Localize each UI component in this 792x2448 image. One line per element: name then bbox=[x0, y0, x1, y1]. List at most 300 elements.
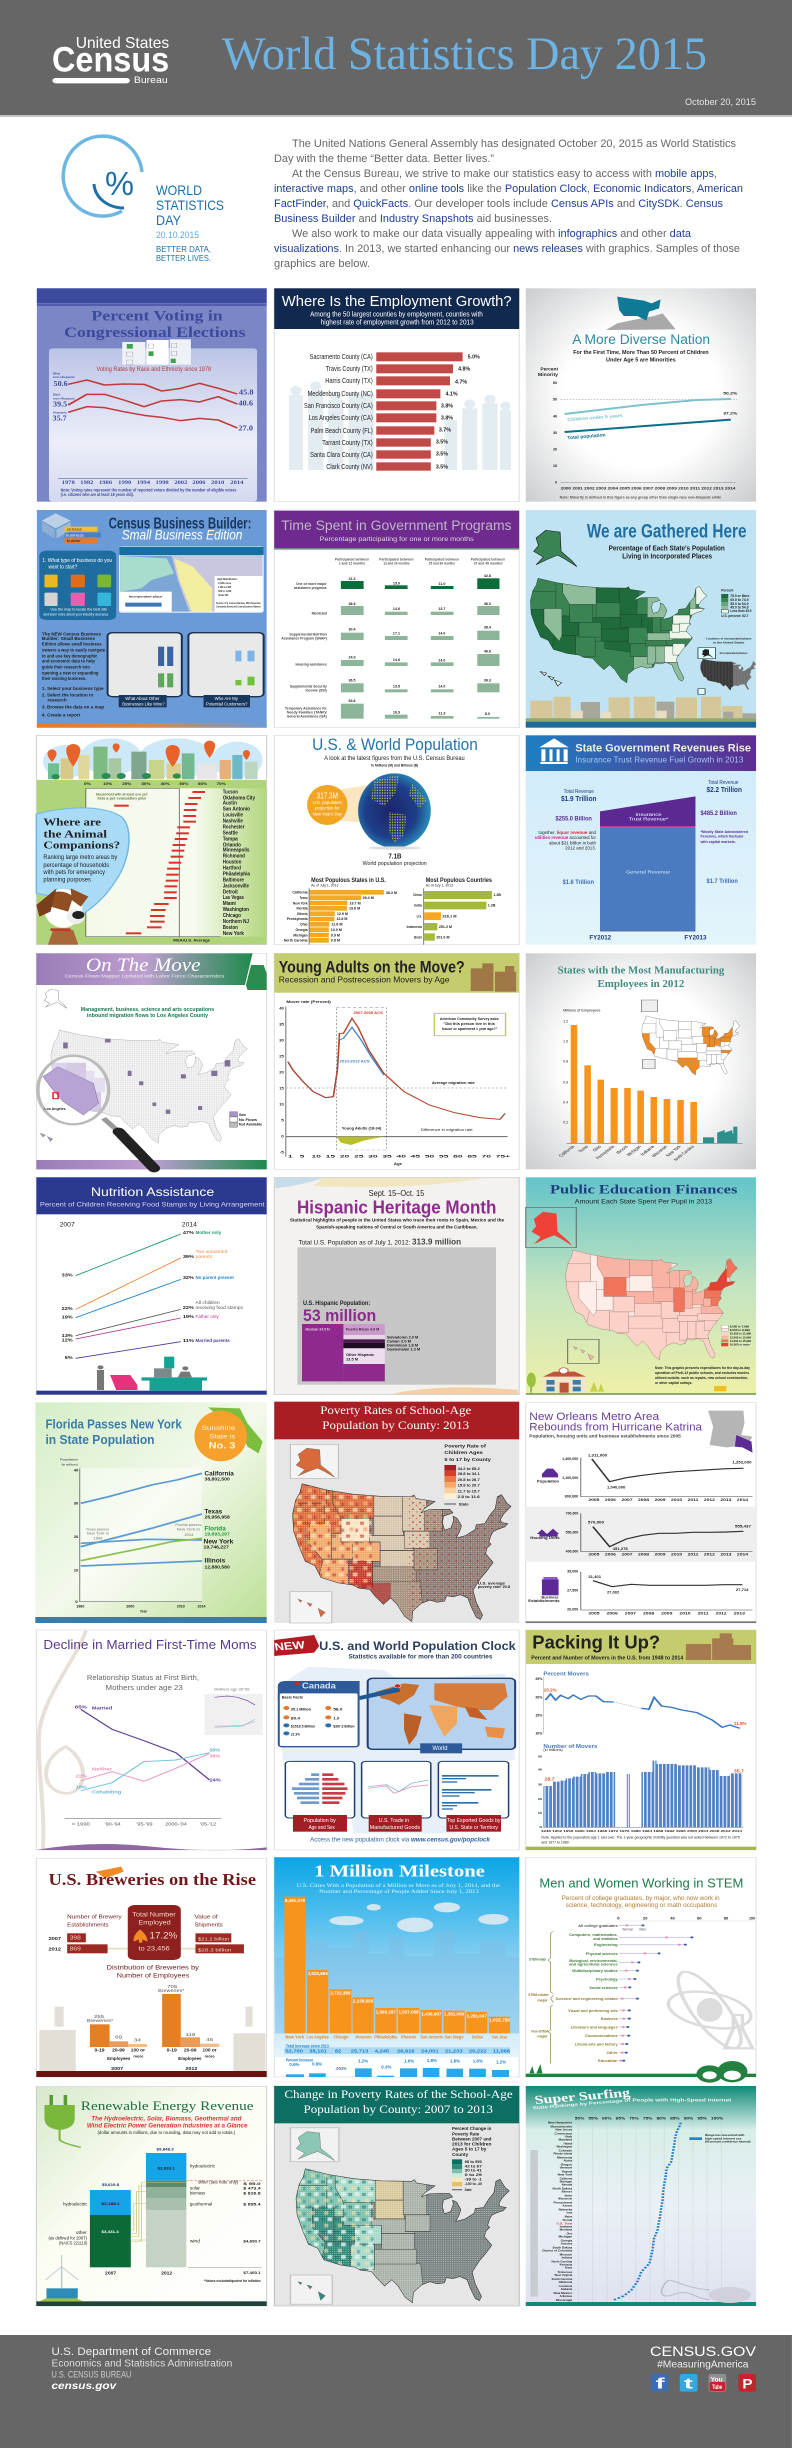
description text: guide their research into bbox=[42, 665, 90, 670]
y axis: 0.2 bbox=[563, 1121, 569, 1124]
major group brackets: STEM major bbox=[529, 1958, 546, 1962]
shipments bars: Shipments bbox=[194, 1921, 223, 1928]
state labels: Georgia bbox=[561, 2239, 573, 2242]
country card bbox=[278, 1681, 360, 1747]
bar values: 14.6 bbox=[393, 658, 400, 662]
major labels: Women bbox=[622, 1928, 634, 1931]
metro names: Baltimore bbox=[223, 878, 244, 883]
axis: 0 bbox=[75, 1600, 78, 1604]
orange population circle: 317.3M bbox=[317, 792, 338, 801]
card: exported goods: Top Exported Goods by bbox=[447, 1818, 501, 1824]
bar values: 2,722,389 bbox=[330, 1992, 351, 1996]
panel: animal companions: MSA/U.S. Average bbox=[173, 939, 210, 943]
employment box: Employed bbox=[138, 1919, 171, 1926]
bars 2007: 69 bbox=[115, 2036, 123, 2040]
series labels: solar bbox=[190, 2187, 200, 2191]
chart: business establishments: 20,000 bbox=[567, 1608, 579, 1611]
state labels: District of Columbia bbox=[542, 2249, 573, 2252]
series labels: (as defined for 2007) bbox=[48, 2236, 87, 2241]
panel: on the move bbox=[36, 953, 267, 1169]
intro text block bbox=[274, 138, 743, 270]
description text: Builder: Small Business bbox=[42, 636, 95, 642]
heading: In Millions (M) and Billions (B) bbox=[371, 764, 419, 767]
right labels: 47% bbox=[183, 1230, 194, 1236]
world population label bbox=[363, 852, 427, 867]
treemap: Dominican 1.8 M bbox=[387, 1344, 418, 1348]
heading: Where Is the Employment Growth? bbox=[282, 293, 512, 309]
bar values: 14.6 bbox=[393, 607, 400, 611]
year axis: 1994 bbox=[137, 479, 150, 486]
world map card: World bbox=[432, 1745, 447, 1752]
year axis bbox=[76, 1605, 206, 1613]
heading bbox=[81, 2099, 254, 2136]
state labels: Montana bbox=[560, 2228, 573, 2231]
treemap: Salvadoran 2.0 M bbox=[387, 1336, 418, 1340]
heading: Percent of Children Receiving Food Stamps by Living Arrangement bbox=[40, 1200, 265, 1208]
metro names: Chicago bbox=[223, 913, 241, 919]
social icons: Tube bbox=[712, 2383, 722, 2391]
legend: 68 to 550 bbox=[465, 2160, 482, 2164]
legend: Percent Change in bbox=[452, 2127, 492, 2132]
value labels: Total Revenue bbox=[564, 789, 594, 795]
card: population pyramid: Age and Sex bbox=[309, 1825, 335, 1831]
panel: married first-time moms bbox=[36, 1630, 267, 1850]
chart labels: non-Hispanic bbox=[53, 376, 76, 379]
map screenshot: Under 500 bbox=[218, 594, 228, 597]
heading: Census Flows Mapper Updated with Labor Force Characteristics bbox=[65, 975, 224, 979]
chart labels: 39.5 bbox=[53, 401, 67, 409]
inset: incorporated places map: in the United States bbox=[713, 641, 744, 644]
major labels: Business bbox=[601, 2017, 618, 2022]
bar values: 38.4 bbox=[484, 626, 491, 629]
bar values: 8.0 bbox=[485, 712, 490, 716]
skyline decoration bbox=[275, 1930, 519, 2033]
bar values: 2,239,558 bbox=[353, 1999, 373, 2004]
column headers: Participated between bbox=[379, 558, 414, 561]
map: Alaska bbox=[534, 530, 577, 567]
chart labels bbox=[53, 372, 254, 433]
report card 2: Potential Customers? bbox=[206, 701, 248, 707]
year axis: 1998 bbox=[156, 479, 169, 486]
numeric increase table: Total increase since 2013 bbox=[286, 2045, 329, 2049]
department text: census.gov bbox=[52, 2380, 117, 2391]
metro names: Oklahoma City bbox=[223, 796, 255, 801]
subheading: Mothers under age 23 bbox=[106, 1683, 183, 1692]
heading bbox=[312, 735, 478, 767]
chart: populous countries bbox=[407, 876, 501, 945]
line labels: 65% bbox=[75, 1705, 87, 1710]
major group brackets bbox=[528, 1932, 554, 2063]
bars 2012: 20-99 bbox=[184, 2049, 196, 2053]
state labels: Ohio bbox=[567, 2232, 573, 2235]
employment box: Total Number bbox=[132, 1911, 176, 1918]
chart: housing units: 570,000 bbox=[588, 1521, 604, 1524]
city labels: New York bbox=[285, 2036, 305, 2040]
legend: -100 to -40 bbox=[465, 2182, 482, 2186]
left values: 19% bbox=[62, 1315, 73, 1320]
survey question box: "Did this person live in this bbox=[443, 1022, 495, 1026]
description text: owners a way to easily navigate bbox=[42, 648, 105, 653]
heading: Wind Electric Power Generation Industries at a Glance bbox=[87, 2122, 248, 2129]
state labels: 19,893,297 bbox=[205, 1533, 230, 1537]
right labels: All children bbox=[195, 1301, 220, 1306]
line labels: 38% bbox=[209, 1754, 220, 1759]
inset: incorporated places map: Locations of incorporated places bbox=[706, 637, 752, 640]
icon: ballots bbox=[122, 339, 191, 365]
chart: housing units: 550,000 bbox=[566, 1531, 579, 1534]
panel: we are gathered here bbox=[526, 510, 756, 728]
county labels: Palm Beach County (FL) bbox=[311, 427, 373, 435]
line labels: 24% bbox=[210, 1779, 221, 1783]
left values: 22% bbox=[62, 1306, 73, 1312]
icon: boxes bbox=[686, 1633, 751, 1660]
legend: 5 to 17 by County bbox=[444, 1457, 491, 1463]
state labels: Illinois bbox=[615, 1144, 630, 1155]
icon: wind and solar bbox=[39, 2255, 83, 2301]
heading: in State Population bbox=[45, 1432, 155, 1447]
icon: truck bbox=[246, 965, 267, 990]
heading: State Rankings by Percentage of bbox=[532, 2098, 631, 2111]
major labels: Engineering bbox=[594, 1943, 618, 1948]
stacked revenue area bbox=[600, 796, 695, 931]
magnified map: Los Angeles bbox=[44, 1107, 66, 1111]
bubble text: Ranking large metro areas by bbox=[43, 854, 118, 861]
bar matrix bbox=[341, 578, 499, 719]
bar values bbox=[285, 1899, 510, 2023]
y-axis labels: -5 bbox=[280, 1151, 284, 1154]
major group brackets: STEM-related bbox=[528, 1993, 548, 1998]
chart labels: Black bbox=[53, 393, 61, 396]
percent axis: 100 bbox=[749, 1917, 756, 1920]
heading: 1 Million Milestone bbox=[314, 1862, 485, 1881]
orange population circle: U.S. population bbox=[313, 801, 342, 806]
Census Bureau logo: United States bbox=[76, 35, 169, 52]
city labels: Los Angeles bbox=[307, 2036, 329, 2040]
state labels: Alaska bbox=[564, 2159, 573, 2162]
state labels: Hawaii bbox=[564, 2142, 572, 2145]
World Statistics Day logo: STATISTICS bbox=[156, 197, 224, 213]
chart: population: Population bbox=[537, 1480, 559, 1484]
y axis: 0.6 bbox=[563, 1081, 569, 1084]
state labels: Arkansas bbox=[560, 2295, 572, 2298]
icon: Florida badge: Sunshine bbox=[202, 1424, 236, 1432]
intro text block: visualizations. In 2013, we started enhancing our news releases with graphics. Samples of those bbox=[274, 243, 740, 255]
panel: men and women in STEM bbox=[526, 1857, 759, 2083]
map screenshot: Source: U.S. Census Bureau, 2013 American bbox=[216, 602, 261, 605]
chart: business establishments bbox=[528, 1570, 753, 1615]
series labels: $ 95.0 bbox=[243, 2182, 261, 2187]
y-axis labels: 25 bbox=[279, 1055, 284, 1058]
icon: cubes bbox=[42, 513, 71, 538]
stacked bar 2012 bbox=[146, 2148, 186, 2276]
chart: housing units: 400,000 bbox=[566, 1550, 579, 1553]
year axis: 2002 bbox=[174, 479, 188, 486]
chart: populous states: Florida bbox=[296, 907, 308, 910]
legend: 0 to 29 bbox=[465, 2173, 482, 2177]
series labels: hydroelectric bbox=[63, 2203, 88, 2207]
city labels: San Antonio bbox=[420, 2036, 443, 2040]
column headers: 1 and 12 months bbox=[339, 561, 365, 565]
annotations: 1994 bbox=[93, 1537, 103, 1540]
numeric increase table bbox=[284, 2045, 510, 2054]
county labels: Travis County (TX) bbox=[326, 365, 373, 373]
percent increase chart: 1.6% bbox=[450, 2060, 460, 2064]
series labels: hydroelectric bbox=[190, 2165, 215, 2169]
legend: 65.0 to 74.9 bbox=[730, 598, 749, 602]
state labels: Wisconsin bbox=[558, 2197, 573, 2200]
percent increase chart: 1.8% bbox=[427, 2059, 437, 2064]
state labels: Massachusetts bbox=[551, 2125, 572, 2128]
chart: population: 2005 2006 2007 2008 2009 2010 2011 2012 2013 2014 bbox=[588, 1498, 749, 1502]
bars 2007: Employees bbox=[107, 2057, 130, 2062]
treemap: Cuban 2.0 M bbox=[387, 1340, 411, 1344]
World Statistics Day logo: 20.10.2015 bbox=[156, 230, 199, 240]
percent axis: 20 bbox=[643, 1917, 648, 1920]
top axis: 30% bbox=[141, 782, 151, 786]
NEW flag bbox=[274, 1635, 319, 1656]
chart: populous states: California bbox=[292, 891, 308, 894]
legend: Poverty Rate of bbox=[444, 1444, 487, 1449]
stacked bar 2007: 2007 bbox=[105, 2271, 116, 2276]
top axis: 50% bbox=[179, 782, 189, 786]
bars 2012: more bbox=[205, 2054, 215, 2058]
stacked revenue area: General Revenue bbox=[626, 870, 671, 875]
county labels: Mecklenburg County (NC) bbox=[308, 390, 373, 398]
state labels: Pennsylvania bbox=[554, 2201, 573, 2204]
series labels: (NAICS 221119) bbox=[59, 2242, 87, 2246]
heading bbox=[284, 2088, 513, 2116]
heading bbox=[320, 1404, 471, 1432]
year axis: Year bbox=[140, 1610, 147, 1613]
callout notes: with capital markets. bbox=[700, 840, 736, 844]
x axis bbox=[72, 1822, 217, 1827]
y-axis labels bbox=[279, 1000, 331, 1154]
employment box: to 23,456 bbox=[138, 1945, 170, 1952]
number of movers chart: 50 bbox=[538, 1755, 542, 1758]
chart annotations: 2010-2012 ACS bbox=[339, 1060, 370, 1063]
speech bubble bbox=[36, 808, 129, 917]
x axis: 2000-'04 bbox=[165, 1822, 187, 1827]
panel: young adults on the move bbox=[274, 953, 519, 1169]
heading: Small Business Edition bbox=[122, 527, 242, 542]
chart: populous states: 9.9 M bbox=[331, 933, 340, 937]
description text: 2. Select the location to bbox=[42, 693, 93, 698]
right labels: Father only bbox=[195, 1315, 219, 1320]
number of movers chart: 35.7 bbox=[734, 1770, 744, 1774]
chart: population: 1,252,000 bbox=[732, 1461, 752, 1464]
left values: 13% bbox=[62, 1333, 73, 1339]
bars 2012: 118 bbox=[185, 2033, 196, 2038]
legend: County bbox=[452, 2153, 469, 2158]
establishments bars: Number of Brewery bbox=[67, 1913, 122, 1920]
heading: U.S. Breweries on the Rise bbox=[48, 1869, 256, 1889]
department text: Economics and Statistics Administration bbox=[52, 2357, 232, 2369]
inset: incorporated places map: Incorporated places bbox=[720, 652, 747, 655]
heading bbox=[281, 518, 512, 543]
icon: grocery checkout bbox=[97, 1357, 207, 1391]
percent increase chart bbox=[286, 2059, 509, 2077]
value labels: Total Revenue bbox=[708, 780, 739, 786]
bars 2012: 2012 bbox=[185, 2067, 198, 2072]
value labels: $1.7 Trillion bbox=[707, 878, 738, 885]
bar values: 36.0 bbox=[484, 602, 491, 606]
right labels: 32% bbox=[183, 1275, 194, 1281]
note: or other capital outlays. bbox=[655, 1381, 692, 1385]
dot plot bbox=[614, 2123, 681, 2300]
year axis: 2010 bbox=[211, 479, 225, 486]
inset boxes bbox=[641, 1000, 658, 1069]
x axis: < 1990 bbox=[72, 1822, 90, 1827]
card: exported goods bbox=[438, 1761, 509, 1832]
population square bbox=[297, 1247, 496, 1385]
row labels: One or more major bbox=[296, 582, 327, 586]
description text: to and use key demographic bbox=[42, 653, 98, 659]
city skyline bbox=[526, 697, 756, 728]
series labels: other bbox=[76, 2231, 87, 2236]
US average note bbox=[478, 1581, 510, 1589]
series labels: wind bbox=[189, 2240, 200, 2244]
chart: populous states: Illinois bbox=[297, 912, 308, 916]
chart: populous countries: India bbox=[414, 904, 422, 907]
World Statistics Day logo: BETTER LIVES. bbox=[156, 253, 211, 263]
line labels: Total population bbox=[567, 433, 606, 441]
axis labels: Percent bbox=[540, 367, 559, 372]
axis labels bbox=[538, 367, 559, 484]
description text bbox=[42, 631, 105, 718]
chart: populous countries: Most Populous Countries bbox=[426, 876, 492, 884]
y-axis labels: 10 bbox=[279, 1103, 284, 1106]
description text: Edition allows small business bbox=[42, 642, 102, 647]
bars 2012: Employees bbox=[178, 2057, 202, 2062]
y axis: 0.4 bbox=[563, 1101, 569, 1104]
fiscal year labels: FY2013 bbox=[684, 933, 707, 941]
year axis: 2006 bbox=[192, 479, 206, 486]
heading: Time Spent in Government Programs bbox=[281, 518, 512, 533]
bar values: 24.0 bbox=[348, 656, 356, 659]
panel: US and world population bbox=[274, 735, 519, 945]
state labels: Maine bbox=[565, 2215, 572, 2218]
fiscal year labels: FY2012 bbox=[589, 933, 611, 941]
description text: 1. Select your business type bbox=[42, 686, 104, 692]
county labels: Los Angeles County (CA) bbox=[309, 414, 373, 422]
chart labels: 50.6 bbox=[54, 381, 68, 388]
treemap: 13.5 M bbox=[346, 1358, 358, 1361]
state labels: New Jersey bbox=[556, 2128, 573, 2131]
icon: magnifying glass bbox=[38, 1056, 154, 1168]
state labels: Colorado bbox=[559, 2149, 573, 2152]
panel: more diverse nation bbox=[526, 288, 756, 502]
legend: Percent bbox=[721, 589, 734, 592]
values: 3.8% bbox=[441, 404, 453, 409]
left values: 33% bbox=[62, 1273, 73, 1278]
heading: A look at the latest figures from the U.S. Census Bureau bbox=[324, 754, 465, 762]
establishments bars: Establishments bbox=[67, 1921, 109, 1928]
heading: Recession and Postrecession Movers by Age bbox=[279, 975, 449, 985]
metro names bbox=[223, 790, 255, 937]
legend note: Range has household with bbox=[705, 2134, 745, 2137]
number of movers chart: 30 bbox=[538, 1783, 542, 1786]
year axis: 1980 bbox=[76, 1605, 85, 1608]
percent axis bbox=[617, 1917, 756, 1921]
distribution heading: Distribution of Breweries by bbox=[107, 1964, 199, 1971]
legend: 10,000 to 11,999 bbox=[730, 1332, 751, 1335]
globe bbox=[336, 773, 431, 850]
bars 2007 bbox=[87, 2015, 147, 2072]
state labels: Indiana bbox=[560, 2225, 573, 2228]
legend: 14,000 to 15,999 bbox=[730, 1340, 751, 1343]
logo tabs: census bbox=[67, 528, 82, 531]
panel: census business builder: Census Business Builder: bbox=[109, 515, 252, 532]
inset: incorporated places map bbox=[698, 637, 756, 694]
stacked bar 2012: $2,093.1 bbox=[158, 2167, 175, 2170]
value labels: $485.2 Billion bbox=[701, 810, 737, 817]
chart: housing units: 700,000 bbox=[566, 1511, 579, 1515]
state labels: Arizona bbox=[561, 2242, 573, 2245]
x-axis labels: 1 5 10 15 20 25 30 35 40 45 50 55 60 65 70 75+ bbox=[288, 1154, 511, 1158]
subheading bbox=[573, 349, 709, 363]
state labels: Rhode Island bbox=[554, 2152, 573, 2155]
percent axis: 80 bbox=[724, 1917, 729, 1920]
axis: 40 bbox=[74, 1468, 79, 1472]
Census Bureau logo: Bureau bbox=[134, 74, 168, 85]
city labels bbox=[285, 2036, 507, 2040]
state labels: Washington bbox=[557, 2145, 573, 2148]
axis labels: 0 bbox=[555, 481, 557, 484]
value labels bbox=[556, 780, 742, 886]
questionnaire box: 1. What type of business do you bbox=[42, 557, 112, 564]
county map bbox=[293, 2167, 511, 2305]
Hawaii inset bbox=[290, 1592, 332, 1623]
country card: $1518.5 Billion bbox=[291, 1724, 315, 1728]
row labels: Supplemental Security bbox=[290, 685, 327, 688]
callout notes: *Mostly State Administered bbox=[701, 830, 748, 834]
heading: Change in Poverty Rates of the School-Age bbox=[284, 2088, 513, 2101]
bars 2007: more bbox=[133, 2054, 144, 2058]
chart: populous countries: 201.0 M bbox=[436, 936, 450, 939]
chart: populous states: Texas bbox=[299, 896, 308, 900]
shipments bars: $28.3 billion bbox=[198, 1947, 232, 1953]
icon: capitol building bbox=[539, 738, 569, 764]
note: Note: Minority is defined in this figure as any group other than single-race non-Hispanic white bbox=[560, 495, 722, 499]
heading: Nutrition Assistance bbox=[91, 1186, 214, 1199]
metro names: Hartford bbox=[223, 866, 241, 871]
heading bbox=[587, 521, 746, 560]
questionnaire box: want to start? bbox=[48, 563, 77, 570]
decoration: mother and child outline bbox=[39, 1631, 86, 1850]
hispanic population: 53 million bbox=[303, 1306, 376, 1325]
panel: super surfing bbox=[526, 2086, 756, 2306]
legend: 75.0 or More bbox=[730, 594, 750, 598]
percent axis: 40 bbox=[670, 1917, 675, 1920]
employment box bbox=[81, 1905, 242, 1960]
chart: population: 1,311,000 bbox=[588, 1454, 607, 1457]
right labels: receiving food stamps bbox=[195, 1306, 243, 1311]
clouds bbox=[329, 1902, 509, 1932]
subheading bbox=[81, 1006, 214, 1019]
stacked bar 2012: $9,848.3 bbox=[157, 2148, 174, 2151]
top axis: 60% bbox=[198, 782, 208, 786]
legend bbox=[452, 2127, 492, 2192]
chart: housing units: 451,278 bbox=[613, 1547, 628, 1551]
state labels: North Carolina bbox=[552, 2260, 573, 2263]
legend: 34.2 to 65.2 bbox=[458, 1467, 480, 1472]
county labels: Santa Clara County (CA) bbox=[310, 451, 373, 459]
line labels bbox=[75, 1705, 221, 1795]
world population label: World population projection bbox=[363, 860, 427, 867]
heading bbox=[550, 1182, 737, 1205]
major labels: Psychology bbox=[596, 1977, 618, 1982]
Census Bureau logo: Census bbox=[52, 40, 169, 79]
